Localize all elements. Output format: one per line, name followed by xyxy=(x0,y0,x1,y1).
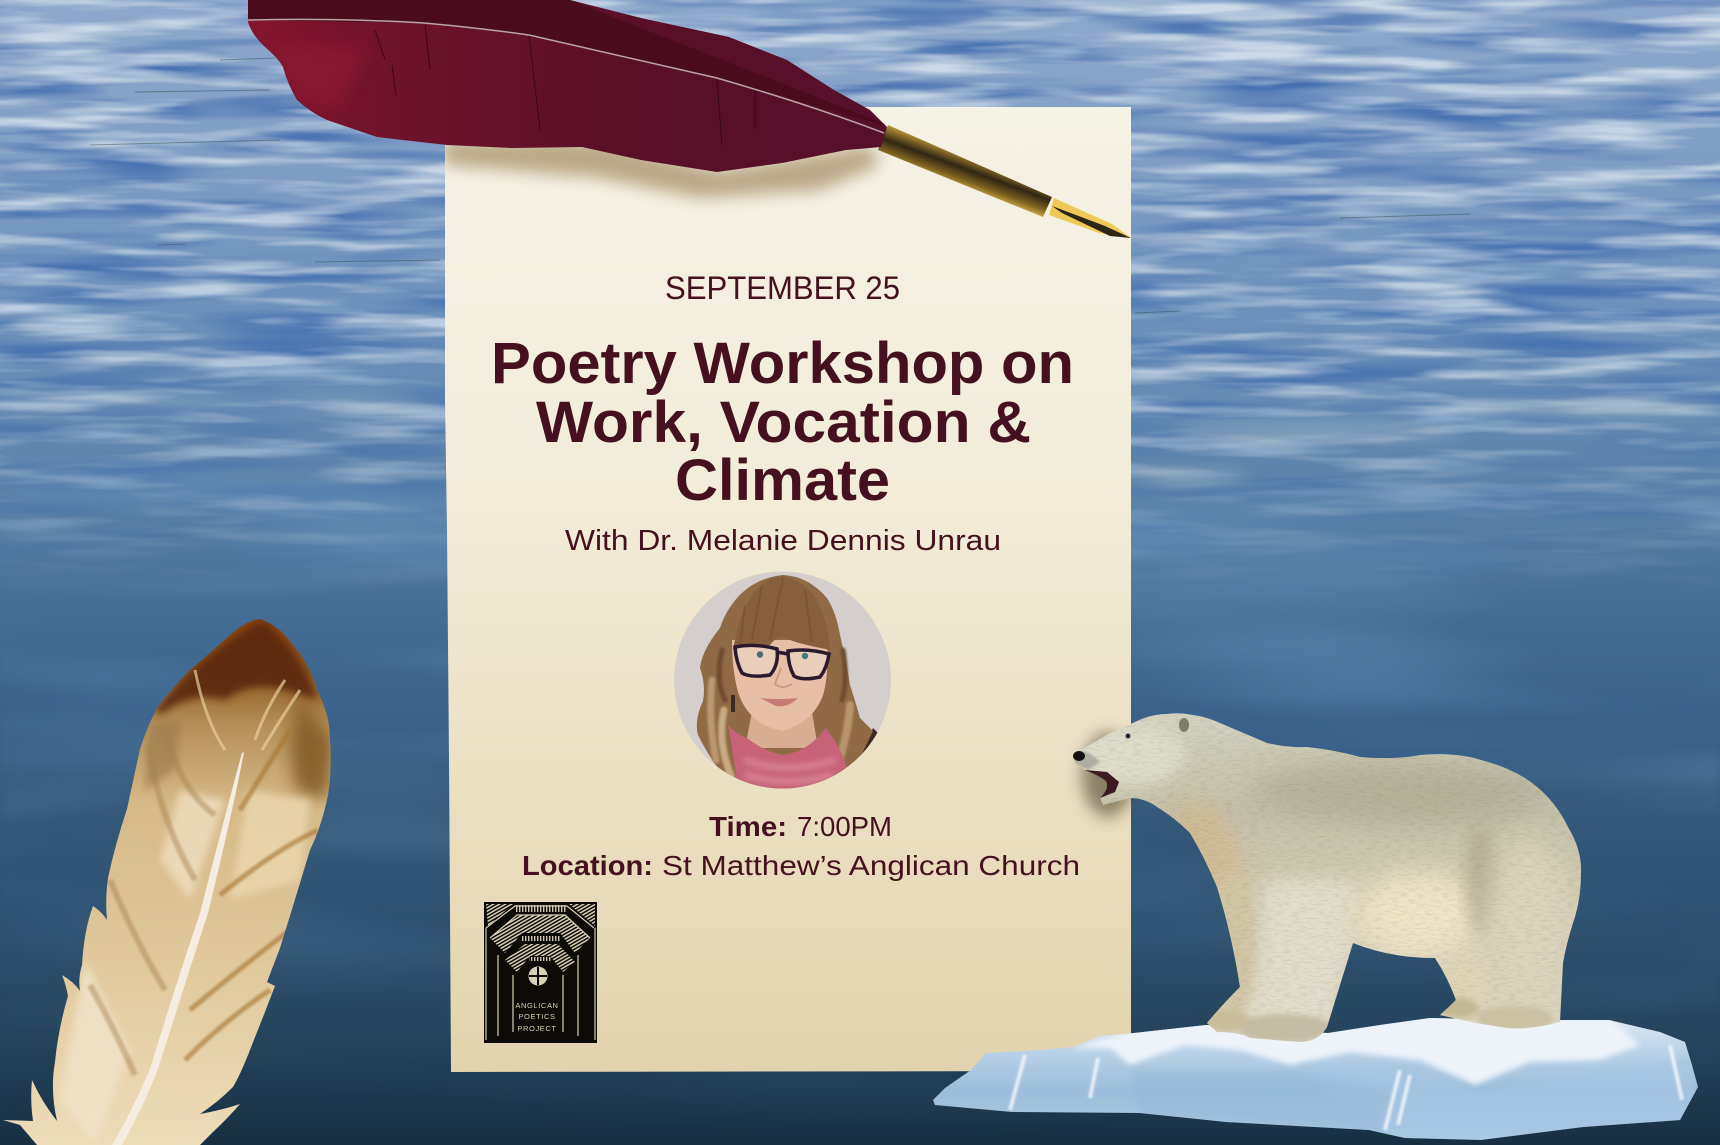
time xyxy=(709,811,892,842)
scarf xyxy=(728,725,847,795)
title: Work, Vocation & xyxy=(536,390,1031,455)
logo text: ANGLICAN xyxy=(515,1001,559,1010)
bear eye xyxy=(1126,734,1130,738)
date: SEPTEMBER 25 xyxy=(665,270,900,306)
logo text: POETICS xyxy=(518,1012,556,1021)
location: Location: xyxy=(522,850,653,881)
portrait photo xyxy=(670,570,895,795)
ice floe xyxy=(933,1015,1700,1140)
earring xyxy=(731,695,735,712)
bear nose xyxy=(1073,751,1085,761)
location: St Matthew’s Anglican Church xyxy=(662,850,1080,881)
paper sheet xyxy=(445,107,1131,1072)
bear shading xyxy=(1075,723,1185,787)
glasses xyxy=(735,645,829,679)
quill pen xyxy=(248,0,1131,238)
bear paws xyxy=(1201,998,1553,1042)
location xyxy=(522,850,1080,881)
nose xyxy=(775,668,792,687)
quill nib and barrel xyxy=(878,125,1131,238)
event details xyxy=(522,811,1080,881)
neck xyxy=(745,712,818,748)
watercolor feather xyxy=(3,619,332,1145)
speaker name: With Dr. Melanie Dennis Unrau xyxy=(565,525,1001,557)
title xyxy=(491,331,1074,513)
bear ear xyxy=(1179,718,1189,732)
mouth xyxy=(760,698,798,706)
hair xyxy=(697,575,873,792)
bangs xyxy=(733,576,830,650)
logo text xyxy=(515,1001,559,1033)
polar bear xyxy=(1070,712,1585,1047)
eyes xyxy=(757,651,808,659)
time: Time: xyxy=(709,811,787,842)
bear shadow on paper xyxy=(1082,733,1134,817)
logo: Anglican Poetics Project xyxy=(484,902,597,1043)
logo vault arches xyxy=(486,904,595,1040)
bear mouth xyxy=(1085,770,1119,798)
logo text: PROJECT xyxy=(517,1024,557,1033)
time: 7:00PM xyxy=(797,811,892,842)
quill shadow on paper xyxy=(440,140,880,198)
title: Poetry Workshop on xyxy=(491,331,1074,396)
quill feather xyxy=(248,0,900,172)
title: Climate xyxy=(675,448,890,513)
sweater xyxy=(860,728,878,756)
logo cross medallion xyxy=(528,966,548,986)
face xyxy=(732,640,828,731)
feather shaft xyxy=(112,752,244,1145)
